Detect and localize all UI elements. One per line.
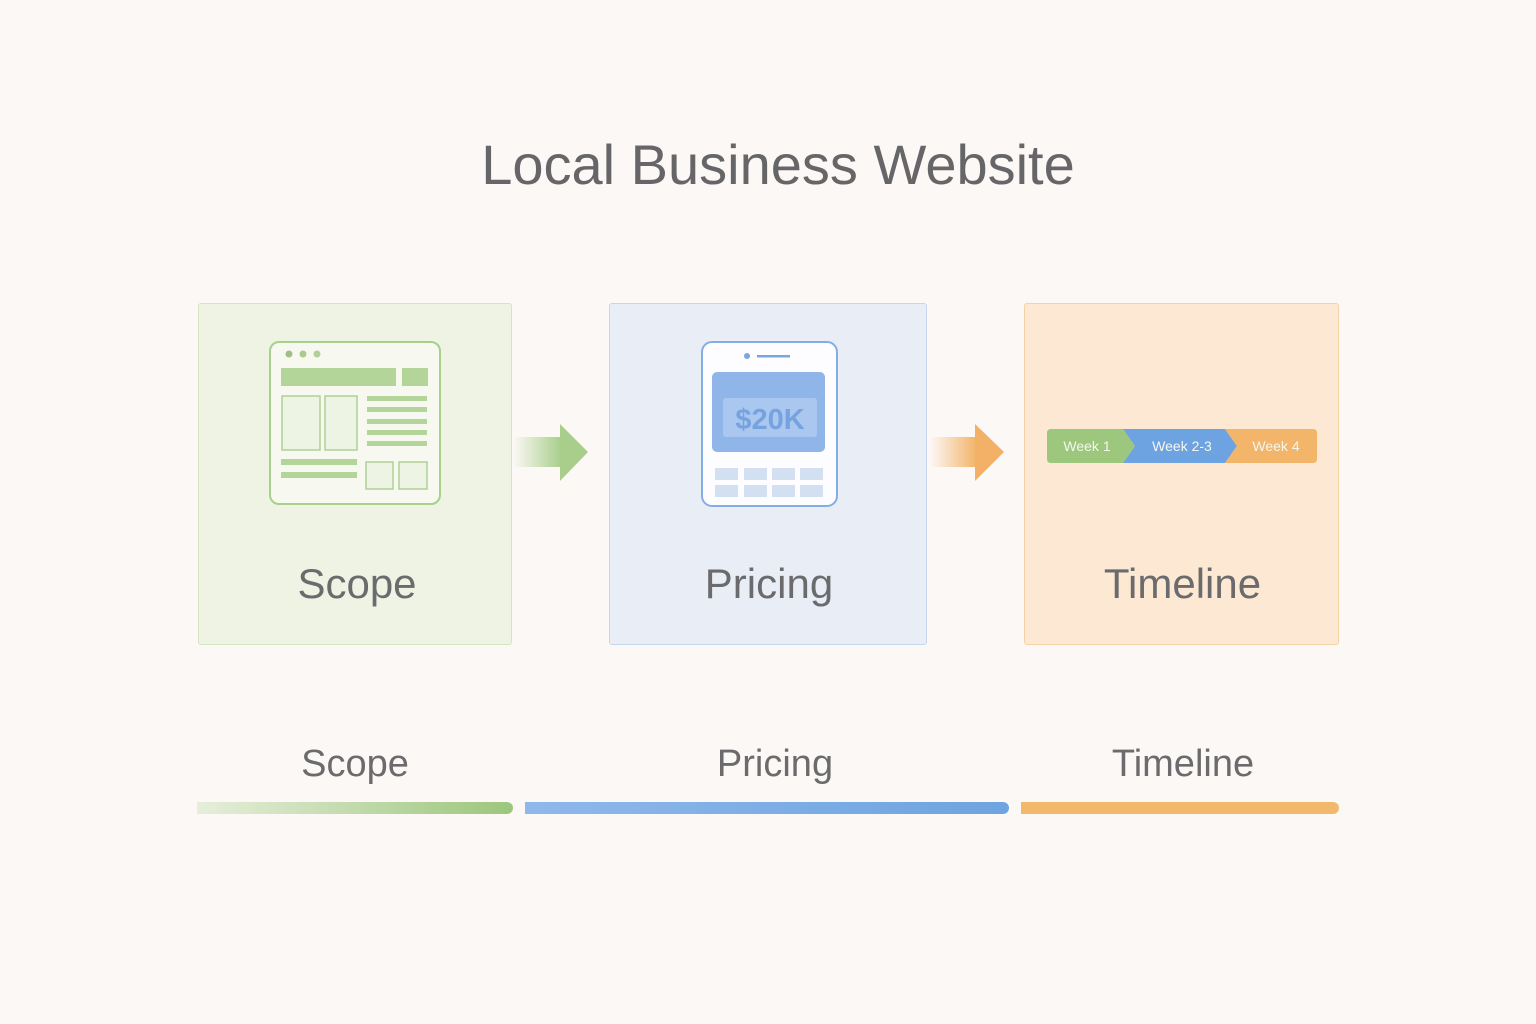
title: Local Business Website (481, 133, 1075, 196)
icon: phone with price: $20K (735, 404, 805, 436)
chart: week chevrons: Week 4 (1252, 438, 1300, 454)
arrow: green (516, 424, 588, 481)
chart: week chevrons (1047, 429, 1317, 463)
panel: scope (198, 303, 512, 645)
label: pricing: Pricing (705, 560, 833, 607)
arrow: orange (932, 424, 1004, 481)
chart: week chevrons: Week 2-3 (1152, 438, 1212, 454)
label: scope: Scope (297, 560, 417, 607)
panel: pricing (609, 303, 927, 645)
bar: pricing (525, 802, 1009, 814)
bottom label: pricing: Pricing (717, 743, 833, 785)
panel: timeline (1024, 303, 1339, 645)
icon: browser wireframe (269, 341, 441, 505)
chart: week chevrons: Week 1 (1063, 438, 1111, 454)
icon: phone with price (701, 341, 838, 507)
label: timeline: Timeline (1104, 560, 1261, 607)
bottom label: scope: Scope (301, 743, 409, 785)
bottom label: timeline: Timeline (1112, 743, 1254, 785)
bar: scope (197, 802, 513, 814)
bar: timeline (1021, 802, 1339, 814)
